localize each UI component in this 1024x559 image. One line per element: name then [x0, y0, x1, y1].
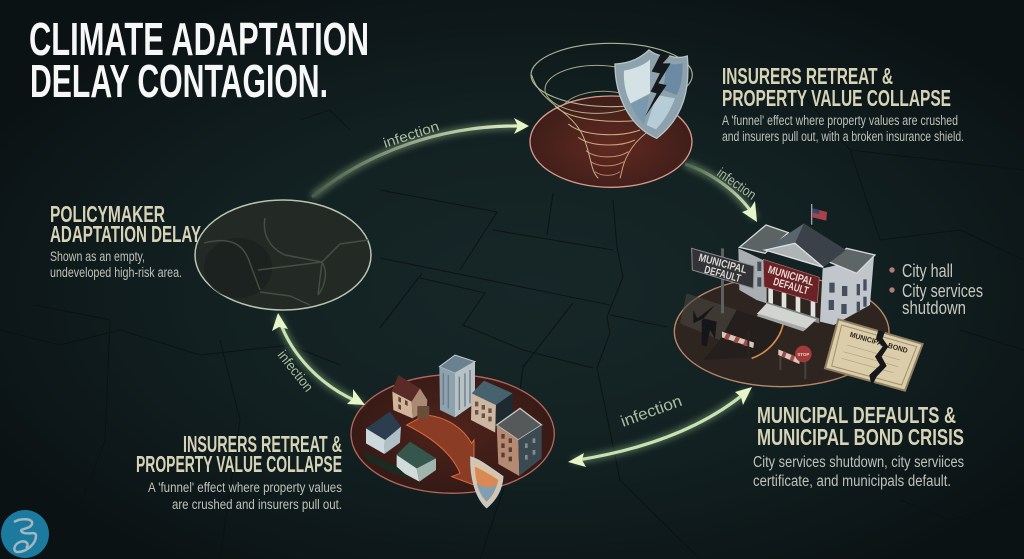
icon: office tower	[439, 355, 475, 417]
title: CLIMATE ADAPTATION	[29, 13, 369, 65]
heading: policymaker adaptation delay: undeveloped high-risk area.	[50, 265, 182, 280]
icon: small insurance shield	[471, 457, 503, 507]
heading: policymaker adaptation delay: Shown as an empty,	[50, 249, 145, 264]
panel: policymaker empty high-risk area	[195, 200, 371, 310]
arrow: municipal to property collapse	[568, 387, 752, 467]
list: city hall notes	[889, 261, 983, 318]
arrow: municipal to property collapse: infection	[619, 393, 685, 431]
heading: insurers retreat bottom: INSURERS RETREAT &	[183, 431, 342, 457]
heading: policymaker adaptation delay	[50, 201, 201, 280]
arrow: property collapse to policymaker	[272, 313, 365, 405]
sign: municipal default	[692, 248, 754, 313]
icon: road barricades and stop sign: STOP	[797, 352, 810, 358]
panel: property collapse neighbourhood	[351, 355, 554, 507]
sign: municipal default: DEFAULT	[703, 264, 742, 285]
icon: brick house	[392, 375, 429, 419]
title: DELAY CONTAGION.	[30, 55, 328, 107]
heading: insurers retreat top	[722, 63, 964, 144]
heading: policymaker adaptation delay: POLICYMAKER	[50, 201, 165, 227]
sign: municipal default: MUNICIPAL	[697, 252, 748, 276]
icon: torn municipal bond certificate	[825, 319, 923, 391]
heading: municipal defaults: MUNICIPAL DEFAULTS &	[757, 402, 956, 428]
list: city hall notes: City hall	[902, 261, 953, 281]
heading: policymaker adaptation delay: ADAPTATION DELAY	[50, 221, 201, 247]
icon: silhouetted figures	[693, 305, 717, 347]
heading: municipal defaults	[753, 402, 964, 490]
heading: insurers retreat bottom: PROPERTY VALUE COLLAPSE	[136, 451, 342, 477]
banner: municipal default	[763, 259, 819, 303]
icon: broken shield	[615, 50, 688, 138]
heading: insurers retreat bottom	[136, 431, 342, 512]
title	[29, 13, 369, 107]
banner: municipal default: MUNICIPAL	[766, 264, 816, 289]
icon: city hall building	[738, 204, 875, 331]
arrow: insurers to municipal	[685, 164, 759, 222]
icon: logo badge	[1, 510, 49, 558]
heading: insurers retreat top: A 'funnel' effect where property values are crushed	[722, 113, 958, 128]
list: city hall notes: shutdown	[902, 298, 966, 318]
icon: mid-rise block	[471, 381, 513, 433]
heading: insurers retreat bottom: A 'funnel' effect where property values	[148, 480, 342, 495]
panel: municipal default scene	[674, 204, 923, 391]
arrow: property collapse to policymaker: infection	[275, 347, 317, 395]
arrow: falling value	[407, 415, 474, 485]
heading: municipal defaults: City services shutdown, city serviices	[753, 454, 964, 471]
banner: municipal default: DEFAULT	[772, 276, 810, 298]
heading: insurers retreat bottom: are crushed and insurers pull out.	[172, 497, 342, 512]
heading: insurers retreat top: INSURERS RETREAT &	[722, 63, 893, 89]
arrow: insurers to municipal: infection	[714, 164, 759, 203]
icon: road barricades and stop sign	[722, 330, 812, 379]
arrow: policymaker to insurers: infection	[381, 118, 441, 151]
list: city hall notes: City services	[902, 281, 983, 301]
icon: blue houses	[363, 412, 436, 482]
panel: funnel with broken insurance shield	[530, 43, 692, 187]
arrow: policymaker to insurers	[312, 118, 529, 197]
icon: tall brick block	[497, 408, 542, 476]
icon: torn municipal bond certificate: MUNICIPAL BOND	[849, 330, 909, 355]
heading: municipal defaults: certificate, and municipals default.	[753, 473, 951, 490]
